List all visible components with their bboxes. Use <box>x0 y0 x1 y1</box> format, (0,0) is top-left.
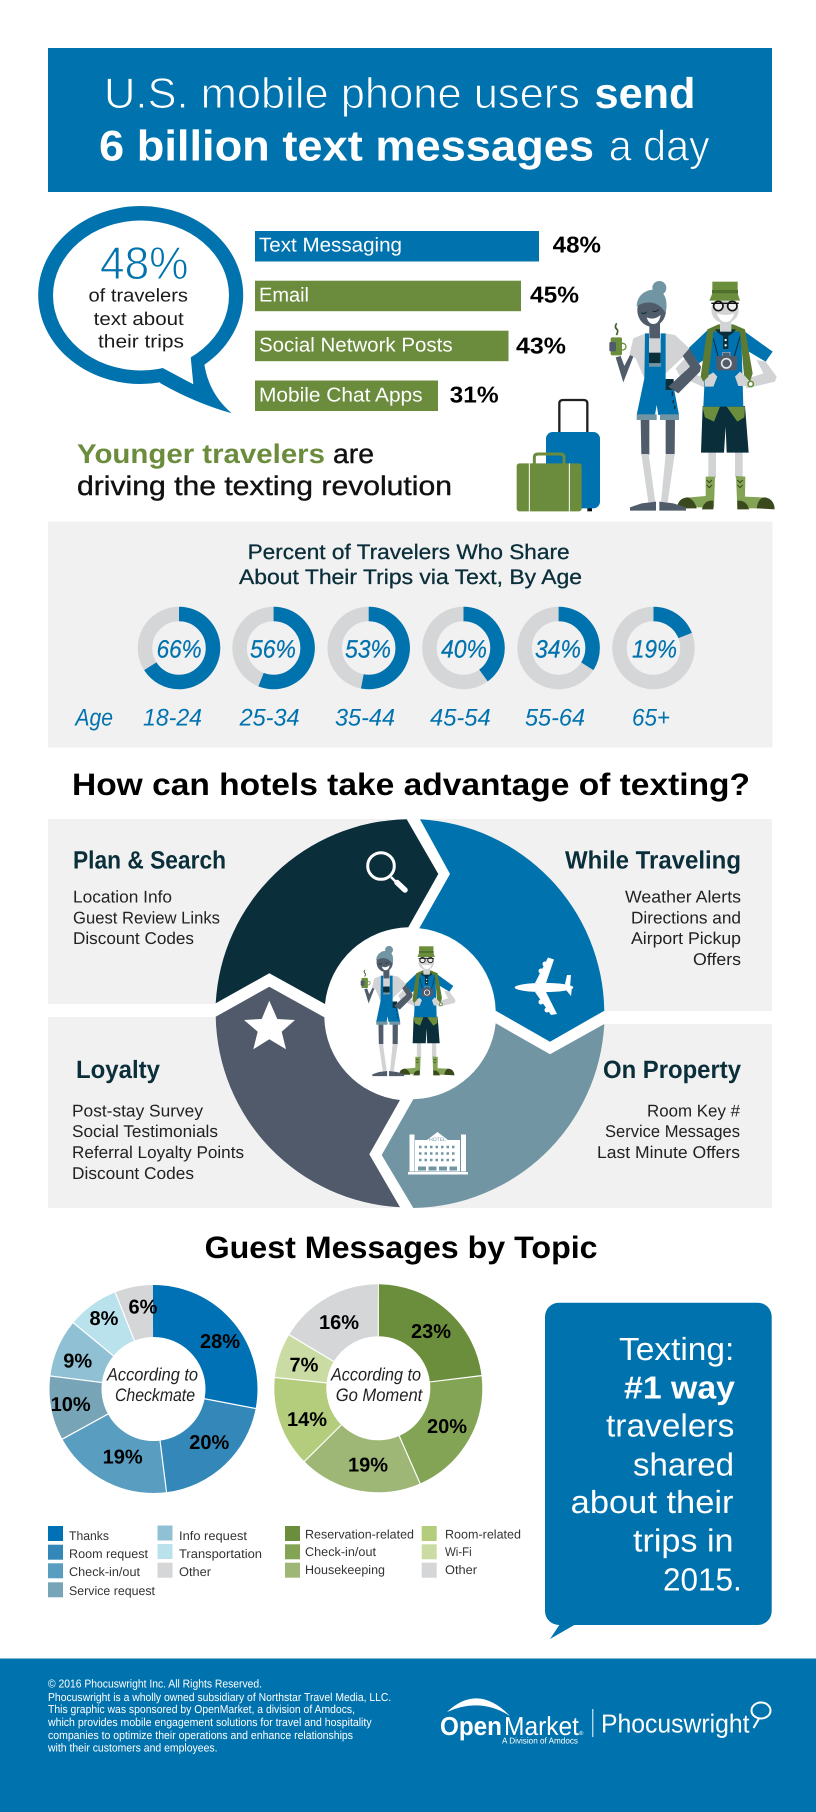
legend: Checkmate: Room request <box>69 1547 149 1561</box>
segment: on property <box>382 1023 604 1208</box>
donut chart: according to Go Moment: 20% <box>427 1416 467 1438</box>
callout: texting #1 way: travelers <box>606 1408 734 1444</box>
donut chart: according to Checkmate: 20% <box>189 1432 230 1454</box>
text block: plan and search: Plan & Search <box>73 846 226 874</box>
callout: texting #1 way: 2015. <box>663 1562 742 1598</box>
donut percentages <box>157 636 677 664</box>
copyright text: © 2016 Phocuswright Inc. All Rights Reserved. <box>48 1679 262 1691</box>
donut chart: according to Checkmate: 6% <box>129 1296 158 1318</box>
donut: 35-44 53% <box>335 614 403 682</box>
text block: plan and search: Guest Review Links <box>73 908 220 927</box>
bar: email <box>255 281 579 311</box>
title banner: send <box>594 70 696 118</box>
text block: loyalty: Referral Loyalty Points <box>72 1143 244 1162</box>
heading: hotels: How can hotels take advantage of texting? <box>72 767 750 802</box>
logo: OpenMarket: A Division of Amdocs <box>502 1736 578 1746</box>
copyright text: Phocuswright is a wholly owned subsidiary of Northstar Travel Media, LLC. <box>48 1692 391 1704</box>
age panel heading: Percent of Travelers Who Share <box>248 541 570 564</box>
age panel heading <box>239 541 582 589</box>
callout: texting #1 way: shared <box>633 1447 734 1483</box>
donut chart: according to Go Moment <box>274 1283 483 1484</box>
copyright text: This graphic was sponsored by OpenMarket, a division of Amdocs, <box>48 1704 355 1716</box>
donut chart: according to Checkmate: 8% <box>90 1308 119 1330</box>
donut chart: according to Checkmate: 9% <box>63 1350 92 1372</box>
heading: younger travelers: driving the texting revolution <box>77 471 452 501</box>
text block: on property: Service Messages <box>605 1122 740 1141</box>
text block: while traveling <box>565 846 741 969</box>
legend: Checkmate: Thanks <box>69 1529 109 1543</box>
donut chart: according to Go Moment: 23% <box>411 1321 451 1343</box>
text block: plan and search <box>73 846 226 948</box>
text block: while traveling: While Traveling <box>565 846 741 874</box>
donut chart: according to Checkmate <box>49 1291 257 1493</box>
heading: younger travelers: are <box>333 439 374 469</box>
logo: OpenMarket: Market <box>504 1711 580 1741</box>
bar: social network posts: Social Network Posts <box>259 335 453 357</box>
icon: luggage <box>517 400 600 511</box>
callout: texting #1 way: about their <box>571 1484 734 1520</box>
icon: magnifier <box>368 853 405 890</box>
donut percentages: 19% <box>632 636 677 664</box>
panel: texting by age <box>48 522 772 748</box>
donut chart: according to Go Moment: 19% <box>348 1455 388 1477</box>
legend: Go Moment: Other <box>445 1563 477 1577</box>
bar: text messaging <box>255 231 601 262</box>
legend: Checkmate <box>48 1526 262 1598</box>
donut chart: according to Go Moment: Go Moment <box>336 1385 423 1405</box>
legend: Go Moment: Check-in/out <box>305 1545 377 1559</box>
text block: plan and search: Discount Codes <box>73 929 194 948</box>
donut: 55-64 34% <box>525 614 593 682</box>
donut chart: according to Go Moment: According to <box>330 1365 421 1385</box>
legend: Checkmate: Transportation <box>179 1547 262 1561</box>
donut: 65+ 19% <box>620 614 688 682</box>
donut chart: according to Checkmate: 28% <box>200 1331 240 1353</box>
icon: hotel <box>408 1132 468 1174</box>
heading: younger travelers: Younger travelers <box>77 439 325 469</box>
age labels: 55-64 <box>525 705 585 732</box>
callout: texting #1 way: Texting: <box>619 1331 734 1367</box>
bar: mobile chat apps: Mobile Chat Apps <box>259 385 423 407</box>
copyright text: which provides mobile engagement solutions for travel and hospitality <box>47 1717 372 1729</box>
bar: social network posts <box>255 331 566 361</box>
text block: loyalty: Discount Codes <box>72 1164 194 1183</box>
copyright text <box>47 1679 391 1755</box>
illustration: two travelers <box>609 281 777 511</box>
text block: while traveling: Directions and <box>631 908 741 927</box>
donut: 45-54 40% <box>430 614 498 682</box>
icon: star <box>244 1001 295 1049</box>
legend: Checkmate: Info request <box>179 1529 248 1543</box>
footer <box>0 1658 816 1812</box>
text block: while traveling: Offers <box>693 950 741 969</box>
logo: OpenMarket: Open <box>440 1711 502 1741</box>
legend: Checkmate: Other <box>179 1565 211 1579</box>
bar: mobile chat apps: 31% <box>450 382 499 408</box>
illustration: travelers in wheel center <box>361 946 456 1076</box>
donut chart: according to Checkmate: Checkmate <box>115 1385 195 1405</box>
donut percentages: 40% <box>441 636 487 664</box>
age labels: 65+ <box>632 705 670 732</box>
bar: email: 45% <box>530 282 579 308</box>
text block: loyalty: Social Testimonials <box>72 1122 218 1141</box>
callout: texting #1 way: #1 way <box>624 1369 735 1405</box>
age labels: 25-34 <box>239 705 300 732</box>
logo: OpenMarket <box>440 1698 584 1746</box>
donut percentages: 56% <box>250 636 296 664</box>
donut: 18-24 66% <box>145 614 213 682</box>
title banner: a day <box>609 122 710 170</box>
text block: plan and search: Location Info <box>73 887 172 906</box>
bar chart: sharing channels <box>255 231 601 411</box>
callout: speech bubble 48%: text about <box>94 308 184 329</box>
donut: 25-34 56% <box>240 614 308 682</box>
bar: mobile chat apps <box>255 380 499 411</box>
text block: on property: Last Minute Offers <box>597 1143 740 1162</box>
text block: loyalty: Loyalty <box>76 1056 160 1084</box>
legend: Go Moment: Housekeeping <box>305 1563 385 1577</box>
bar: text messaging: Text Messaging <box>259 235 402 257</box>
bar: text messaging: 48% <box>553 232 601 258</box>
title banner: U.S. mobile phone users <box>104 70 580 118</box>
age panel heading: About Their Trips via Text, By Age <box>239 566 582 589</box>
donut chart: according to Go Moment: 16% <box>319 1312 359 1334</box>
age labels: 45-54 <box>430 705 491 732</box>
segment: while traveling <box>419 819 604 1042</box>
title banner <box>48 48 772 192</box>
cycle wheel <box>216 819 604 1208</box>
callout: speech bubble 48% <box>38 206 243 413</box>
text block: while traveling: Airport Pickup <box>631 929 741 948</box>
legend: Checkmate: Check-in/out <box>69 1565 141 1579</box>
legend: Go Moment: Reservation-related <box>305 1527 414 1541</box>
title banner: 6 billion text messages <box>99 122 594 170</box>
donut chart: according to Checkmate: 19% <box>103 1446 143 1468</box>
donut chart: according to Go Moment: 7% <box>290 1355 319 1377</box>
text block: on property: On Property <box>603 1056 741 1084</box>
callout: speech bubble 48%: 48% <box>100 237 188 289</box>
panel: hotel texting stages background <box>48 819 772 1208</box>
logo: OpenMarket: ® <box>579 1730 584 1737</box>
bar: social network posts: 43% <box>516 332 566 358</box>
age labels <box>74 705 670 732</box>
callout: speech bubble 48%: their trips <box>98 331 184 352</box>
age labels: Age <box>74 705 113 732</box>
legend: Go Moment <box>285 1526 521 1578</box>
callout: speech bubble 48%: of travelers <box>88 285 188 306</box>
legend: Checkmate: Service request <box>69 1584 156 1598</box>
icon: plane <box>515 958 573 1015</box>
heading: younger travelers <box>77 439 452 501</box>
legend: Go Moment: Room-related <box>445 1527 521 1541</box>
donut chart: according to Checkmate: According to <box>106 1365 198 1385</box>
age labels: 18-24 <box>143 705 202 732</box>
callout: texting #1 way: trips in <box>633 1523 734 1559</box>
segment: loyalty <box>216 987 400 1207</box>
heading: guest messages: Guest Messages by Topic <box>205 1230 598 1265</box>
text block: on property: Room Key # <box>647 1102 741 1121</box>
logo: Phocuswright: Phocuswright <box>601 1709 750 1739</box>
text block: while traveling: Weather Alerts <box>625 887 741 906</box>
age labels: 35-44 <box>335 705 395 732</box>
donut chart: according to Checkmate: 10% <box>51 1394 91 1416</box>
segment: plan and search <box>216 819 438 1004</box>
icon: hotel: HOTEL <box>429 1137 446 1143</box>
copyright text: with their customers and employees. <box>47 1743 217 1755</box>
text block: on property <box>597 1056 741 1162</box>
copyright text: companies to optimize their operations and enhance relationships <box>48 1730 353 1742</box>
donut chart: according to Go Moment: 14% <box>287 1409 327 1431</box>
bar: email: Email <box>259 285 309 307</box>
donut percentages: 34% <box>535 636 581 664</box>
donut percentages: 53% <box>345 636 391 664</box>
text block: loyalty: Post-stay Survey <box>72 1102 203 1121</box>
callout: texting #1 way <box>545 1303 772 1639</box>
donut percentages: 66% <box>157 636 202 664</box>
text block: loyalty <box>72 1056 244 1183</box>
legend: Go Moment: Wi-Fi <box>445 1545 472 1559</box>
